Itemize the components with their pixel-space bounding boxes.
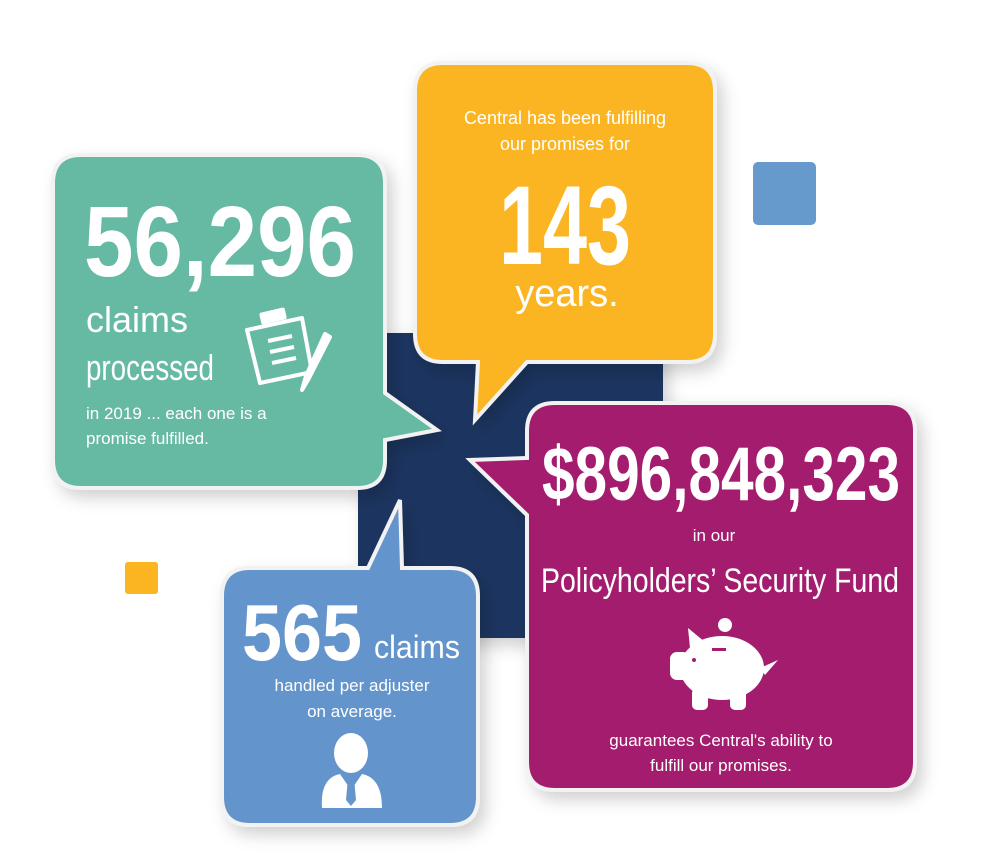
panel: claims processed (green bubble): processed xyxy=(86,347,214,388)
text: claims processed: claims xyxy=(86,299,188,340)
panel: claims processed (green bubble): promise fulfilled. xyxy=(86,429,209,448)
text: in our: in our xyxy=(693,526,736,545)
number 56,296: 56,296 xyxy=(84,186,356,298)
panel: per adjuster (blue bubble): claims xyxy=(374,629,460,665)
icon: person xyxy=(322,733,382,808)
panel: security fund (magenta bubble): fulfill our promises. xyxy=(650,756,792,775)
panel: years (yellow bubble): our promises for xyxy=(500,134,630,154)
panel: per adjuster (blue bubble) xyxy=(222,500,478,825)
panel: security fund (magenta bubble) xyxy=(470,403,915,790)
accent square yellow xyxy=(125,562,158,594)
text: handled per adjuster: handled per adjuster xyxy=(274,676,430,695)
panel: per adjuster (blue bubble): on average. xyxy=(307,702,397,721)
text: guarantees: guarantees Central's ability to xyxy=(609,731,833,750)
icon: clipboard and pen xyxy=(247,310,330,390)
text: intro: Central has been fulfilling xyxy=(464,108,666,128)
text: fund name: Policyholders’ Security Fund xyxy=(541,562,899,600)
accent square blue xyxy=(753,162,816,225)
panel: claims processed (green bubble) xyxy=(53,155,437,488)
icon: piggy bank xyxy=(670,618,778,710)
number 565 claims: 565 xyxy=(242,588,362,677)
text: years: years. xyxy=(515,273,619,315)
navy center square xyxy=(358,333,663,638)
text: in 2019: in 2019 ... each one is a xyxy=(86,404,267,423)
number 143: 143 xyxy=(499,163,631,288)
panel: years (yellow bubble) xyxy=(415,63,715,420)
number $896,848,323: $896,848,323 xyxy=(542,432,900,517)
